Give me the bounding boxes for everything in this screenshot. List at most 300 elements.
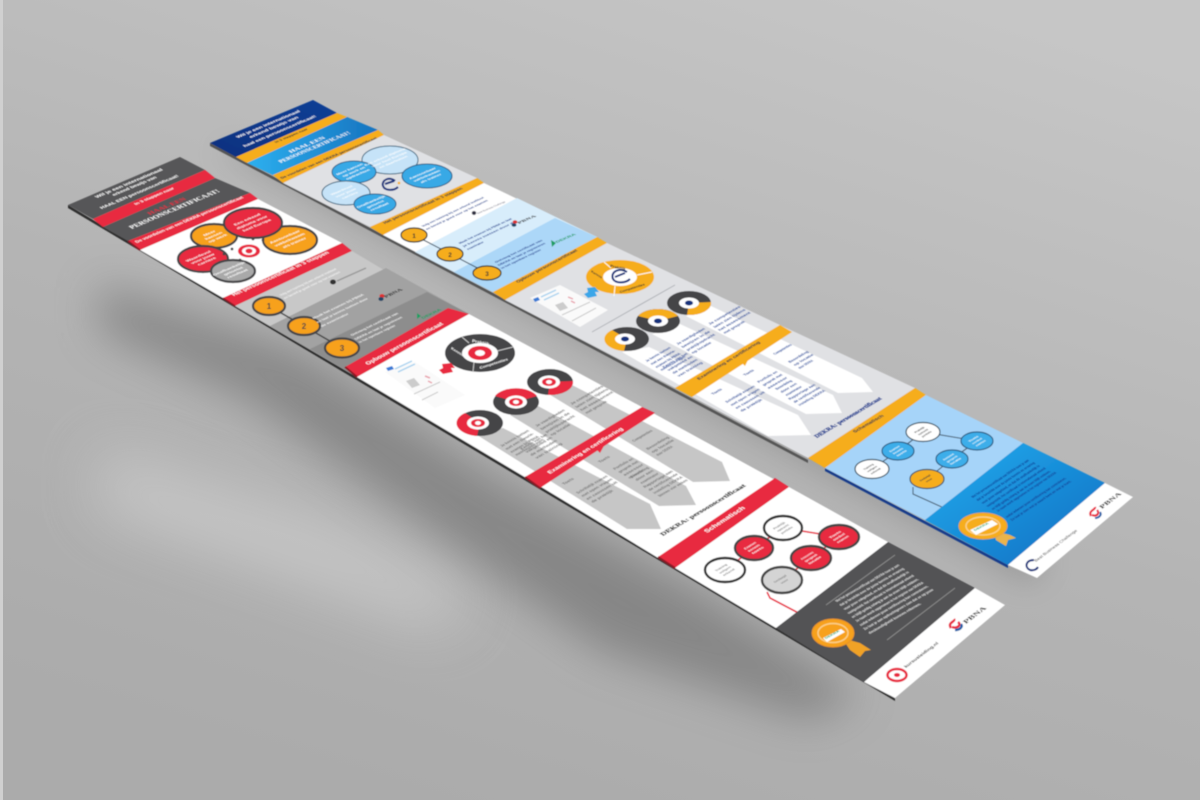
column: praktijk arrow <box>510 406 696 506</box>
text: closing paragraph: en blijft geldig zolang je aan de eisen blijft voldoen. <box>850 578 921 619</box>
flow node labels: Praktijk <box>772 521 787 530</box>
certificate example <box>530 285 608 327</box>
flow node labels: Examen <box>889 445 901 453</box>
logo: business challenge <box>330 268 366 284</box>
column texts: door DEKRA <box>655 445 675 457</box>
chart: small donut competenties <box>527 369 573 395</box>
flow node 3 <box>906 422 940 442</box>
step 2: 2 <box>448 252 452 259</box>
bubble texts: diploma voor <box>235 215 269 230</box>
mockup: blue and yellow strip <box>210 100 1133 578</box>
column: competenties arrow <box>686 306 873 393</box>
column texts: examinator <box>784 385 804 397</box>
heading: examinering: Examinering en certificering <box>547 427 625 475</box>
column texts: bewijzen in de <box>539 412 572 431</box>
bubble texts: Onafhankelijk <box>355 194 387 208</box>
column texts: de certificerende <box>647 473 680 492</box>
text: voordelen: De voordelen van een DEKRA persoonscertificaat <box>279 137 379 180</box>
step texts: Ontvang het certificaat van <box>349 312 400 336</box>
bubble texts: vakbekwaam <box>412 169 442 182</box>
column texts: het assessment <box>717 311 752 332</box>
band: opbouw <box>345 308 469 377</box>
band: voordelen <box>273 130 384 183</box>
connectors <box>872 432 977 513</box>
logo: business challenge <box>472 201 507 215</box>
column texts: Kennis van het <box>661 352 690 369</box>
flow node labels: examen <box>836 535 850 544</box>
flow node labels: Training <box>714 563 728 572</box>
column: kennis arrow <box>622 347 811 436</box>
flow node labels <box>863 426 987 484</box>
bubble texts: getoetst <box>365 199 386 209</box>
column texts: met een theorie- <box>504 432 536 451</box>
bubble texts: Een erkend <box>233 213 262 226</box>
heading: header question: HAAL EEN persoonscertificaat! <box>99 175 181 210</box>
heading: schematisch: Schematisch <box>852 414 886 434</box>
flow node labels <box>714 521 851 586</box>
heading: schematisch: Schematisch <box>702 505 747 534</box>
bubble texts: Meer kansen <box>335 162 364 176</box>
step 2 <box>288 317 320 335</box>
bubble: grey lower <box>211 260 255 282</box>
bubble: blue left <box>332 161 376 183</box>
column texts: assessor <box>766 376 789 390</box>
panel: blue closing section <box>925 443 1105 565</box>
column texts: assessor <box>622 463 646 477</box>
column texts: Toets <box>561 477 576 486</box>
text: closing paragraph: Met het persoonscertificaat van DEKRA toon je aan <box>970 459 1031 499</box>
flow node labels: volgen <box>866 465 879 473</box>
panel: schematisch <box>675 487 888 628</box>
flow node labels: Toets <box>828 530 843 539</box>
flow node 3 <box>764 516 802 540</box>
heading: dekra persoonscertificaat: DEKRA: persoonscertificaat <box>658 483 748 537</box>
band: voordelen <box>128 193 258 250</box>
chart: large donut: Competenties <box>479 357 509 370</box>
bubble texts: heel Europa <box>241 218 273 232</box>
column texts: op locatie <box>650 439 676 454</box>
logo: PBNA footer <box>950 605 989 630</box>
column texts: Kennis van het <box>519 433 549 451</box>
flow node labels: oordeel <box>832 533 846 541</box>
column texts: Schriftelijk examen <box>724 385 757 404</box>
title <box>276 130 352 164</box>
bubble texts: Meer <box>202 230 217 237</box>
bubble texts: voor heel Europa <box>370 151 409 168</box>
logo: PBNA: PBNA <box>516 215 538 225</box>
title: PERSOONSCERTIFICAAT! <box>276 130 352 164</box>
text: footer site: kursusleiding.nl <box>903 641 941 669</box>
bubble texts: Onafhankelijk <box>212 261 247 276</box>
column texts: door een <box>779 382 799 394</box>
flow node labels: opdracht <box>917 428 930 436</box>
bubble texts: carrière <box>196 256 218 266</box>
pointer dots <box>223 238 264 261</box>
flow node 2 <box>882 442 914 460</box>
bubble texts: Waardevol <box>185 250 212 262</box>
heading: header question: haal een persoonscertificaat! <box>242 115 318 148</box>
column texts: Rapportage aan <box>787 383 817 401</box>
flow node 5 <box>936 450 968 468</box>
band: yellow intro <box>236 113 347 163</box>
heading: header question: erkend bewijs van <box>248 116 300 139</box>
connectors <box>725 528 839 618</box>
column texts: Beoordeling <box>629 466 651 479</box>
flow node labels: portfolio <box>780 526 794 535</box>
flow node labels: kennis <box>747 543 762 552</box>
step 1: 1 <box>267 302 272 311</box>
chart: large donut: Competenties <box>619 283 645 294</box>
logo: PBNA footer: PBNA <box>1097 490 1124 510</box>
heading: dekra persoonscertificaat: DEKRA: persoonscertificaat <box>812 396 884 439</box>
arrow <box>584 287 599 298</box>
heading: opbouw: Opbouw persoonscertificaat <box>363 321 445 366</box>
certificate example <box>385 361 465 408</box>
panel: lower grey section <box>675 325 915 458</box>
flow node labels: toets <box>896 450 908 457</box>
bubble texts: als trainer <box>419 173 443 184</box>
text: closing paragraph <box>970 459 1073 522</box>
text: closing paragraph: en blijft geldig zolang je aan de eisen blijft voldoen. <box>990 470 1052 511</box>
column texts: van training <box>676 361 704 378</box>
flow node 4 <box>961 432 993 450</box>
bubble texts <box>185 212 311 281</box>
column texts: laten zien tijdens <box>574 388 610 409</box>
column texts: op locatie <box>549 423 572 437</box>
flow node 6 <box>762 567 802 593</box>
step texts: Volg een training bij een erkend instituut <box>421 196 486 227</box>
flow node labels: portfolio <box>921 430 933 438</box>
band: het persoonscertificaat in 3 stappen <box>223 243 352 306</box>
chart: large donut <box>445 334 515 372</box>
column texts <box>499 385 690 504</box>
flow node labels: Geslaagd <box>919 474 932 482</box>
flow node labels: kennis <box>892 447 904 455</box>
column texts: de methoden <box>671 358 699 375</box>
step texts <box>421 196 547 269</box>
chart: small donut praktijk <box>636 309 680 333</box>
mockup: grey and red strip <box>68 157 1005 701</box>
column texts: door DEKRA <box>797 359 815 370</box>
text: closing paragraph: dat je beschikt over de juiste kennis en ervaring <box>838 567 906 607</box>
step texts: DEKRA en laat je registreren <box>497 242 547 266</box>
text: closing paragraph: Zo laat je aan opdrachtgevers zien dat ze op jouw <box>862 588 935 631</box>
text: closing paragraph: voor jouw vakgebied, en dat dit onafhankelijk is <box>980 464 1042 505</box>
step 1 <box>401 228 427 242</box>
column texts: Toets <box>710 388 724 396</box>
bubble texts: getoetst <box>222 266 245 276</box>
bubble texts: carrière <box>340 191 360 200</box>
icon: logo e <box>383 179 400 190</box>
text: in 3 stappen: In 3 stappen naar <box>273 128 309 143</box>
flow node labels: locatie <box>949 457 962 465</box>
icon: medal <box>959 513 1016 546</box>
bubble texts: opdrachten <box>345 168 372 180</box>
column texts: met een theorie- <box>649 349 678 366</box>
column texts: gesprek met <box>761 373 784 387</box>
column texts: het assessment <box>579 391 615 412</box>
panel: dark closing section <box>776 542 975 682</box>
column texts: praktijkopdracht <box>544 415 577 434</box>
step 2: 2 <box>302 322 307 331</box>
text: closing paragraph: voor jouw vakgebied, en dat dit onafhankelijk is <box>842 571 911 611</box>
step 1: 1 <box>412 233 416 240</box>
flow node labels: erkend <box>870 467 882 475</box>
step texts: in het openbare register <box>357 324 397 343</box>
step 3 <box>325 338 359 358</box>
text: closing paragraph: vastgesteld. Het certificaat is internationaal erkend <box>985 467 1048 508</box>
step texts: in het openbare register <box>500 249 543 269</box>
flow node labels: oordeel <box>971 437 983 445</box>
panel: navy header <box>210 100 337 157</box>
column texts: meerkeuzevragen <box>514 438 546 457</box>
column texts: meerkeuzevragen <box>659 355 687 372</box>
column texts: en casussen uit <box>585 481 619 501</box>
chart: small donut praktijk <box>493 388 539 415</box>
flow node labels: voor <box>925 477 934 483</box>
heading: 3 stappen: Het persoonscertificaat in 3 stappen <box>231 251 331 297</box>
heading: examinering: Examinering en certificering <box>696 341 762 381</box>
logo: DEKRA: DEKRA <box>420 308 444 320</box>
panel: three steps <box>235 251 469 377</box>
connector line <box>269 306 342 348</box>
column texts: Beoordeling <box>787 350 810 364</box>
flow node labels: Praktijk <box>914 426 926 434</box>
column texts: binnen vier weken <box>657 479 690 498</box>
step texts: DEKRA en laat je registreren <box>353 316 404 340</box>
bubble: red big <box>224 208 282 238</box>
text: closing paragraph: Je naam wordt opgenomen in het register van DEKRA <box>854 581 926 623</box>
text: closing paragraph: Met het persoonscertificaat van DEKRA toon je aan <box>834 564 901 603</box>
bubble texts: als trainer <box>281 237 308 248</box>
panel: footer <box>864 588 1005 698</box>
chart: large donut: Praktijk <box>610 263 627 271</box>
flow node labels: erkend <box>722 568 736 577</box>
column texts: Beoordeling <box>645 436 671 451</box>
column texts: met open vragen <box>580 478 614 498</box>
logo: PBNA <box>512 215 538 227</box>
icon: medal: DEKRA <box>973 522 990 531</box>
column texts: praktijkopdracht <box>685 333 717 352</box>
column texts: de praktijk <box>590 489 616 504</box>
title: HAAL EEN <box>288 136 327 154</box>
column texts: Competenties <box>772 343 794 356</box>
chart: large donut <box>586 260 654 296</box>
column texts: Je vaardigheden <box>675 327 707 346</box>
flow node 1 <box>855 460 889 478</box>
text: closing paragraph: zodat iedereen jouw certificering kan controleren. <box>1004 477 1068 519</box>
bubble texts: kansen <box>204 231 224 240</box>
column texts: Toets <box>742 369 756 377</box>
column texts: Portfolio en <box>756 370 779 384</box>
column texts: Rapportage aan <box>642 470 675 489</box>
panel: three steps <box>383 183 597 292</box>
text: closing paragraph: Zo laat je zien wat je waard bent en wat je kunt. <box>1009 480 1073 522</box>
column texts: gesprek met <box>617 460 640 474</box>
logo: PBNA footer: PBNA <box>961 605 989 625</box>
column texts: op locatie <box>627 469 645 480</box>
flow node labels: toets <box>751 545 766 555</box>
text: closing paragraph: vastgesteld. Het certificaat is internationaal erkend <box>846 574 916 615</box>
bubble texts: Aantoonbaar <box>408 166 438 180</box>
step texts: Volg een training bij een erkend instituut <box>278 267 338 296</box>
panel: dark top header <box>68 157 205 219</box>
column texts: Beoordeling <box>774 379 794 391</box>
step 1 <box>253 297 285 315</box>
column texts: laten zien tijdens <box>712 308 747 329</box>
column texts: Competenties <box>631 429 654 443</box>
panel: blue title <box>247 117 378 175</box>
step texts: examinator <box>466 241 485 250</box>
flow node labels: Training <box>863 463 875 471</box>
column texts: bewijzen in de <box>680 330 712 349</box>
column texts: de methoden <box>529 439 559 457</box>
logo: DEKRA <box>551 233 578 247</box>
column texts: Schriftelijk examen <box>575 475 609 495</box>
connector <box>414 235 487 273</box>
step texts: en bereid je goed voor op het examen <box>425 199 490 230</box>
column texts: de certificerende <box>792 386 822 404</box>
chart: large donut: Kennis <box>451 347 464 357</box>
chart: small donut kennis <box>457 410 503 436</box>
bubble texts: en daarbuiten <box>378 155 409 169</box>
bubble texts: voor jouw <box>190 253 216 265</box>
logo: best business challenge: Best Business Challenge <box>1033 529 1079 563</box>
chart: small donut competenties <box>667 291 711 315</box>
text: closing paragraph: deskundigheid kunnen rekenen. <box>867 602 923 635</box>
step texts: de examinator <box>319 312 350 327</box>
chart: large donut: Kennis <box>591 270 602 280</box>
separator <box>592 285 675 332</box>
bubble: orange left <box>191 224 237 248</box>
heading: opbouw: Opbouw persoonscertificaat <box>515 249 579 284</box>
band: examinering <box>675 325 792 397</box>
column texts: Je kennis toetsen <box>644 346 672 363</box>
step texts: je kennis toetsen door de <box>461 221 517 248</box>
flow node labels: voor <box>779 578 790 584</box>
text: closing paragraph: dat je beschikt over de juiste kennis en ervaring <box>975 461 1037 502</box>
band: schematisch <box>658 478 789 568</box>
flow node 6 <box>910 470 944 488</box>
column texts: en casussen uit <box>734 391 767 410</box>
heading: header question: Wil je een internationaal <box>94 168 165 199</box>
flow node labels: gesprek <box>803 553 819 563</box>
bubble texts: op werk <box>207 233 229 243</box>
logo: PBNA footer <box>1090 490 1124 518</box>
strip side edge <box>210 143 1008 568</box>
band: red intro <box>93 170 215 227</box>
flow node 5 <box>791 546 831 570</box>
column texts: door een <box>634 469 655 482</box>
step 2 <box>437 247 463 261</box>
logo: best business challenge <box>1027 529 1079 570</box>
text: in 3 stappen: In 3 stappen naar <box>133 187 176 206</box>
logo: red ring <box>888 669 906 681</box>
heading: header question: erkend bewijs van <box>111 176 159 197</box>
bubble texts: vakbekwaam <box>273 232 306 247</box>
step texts: Ontvang het certificaat van <box>494 239 544 263</box>
panel: opbouw <box>505 243 780 388</box>
column texts: van training <box>534 442 564 460</box>
column texts: met open vragen <box>729 388 762 407</box>
column texts: Je kennis toetsen <box>499 429 531 448</box>
bubble texts: resultaat <box>226 268 250 279</box>
bubble: pale lower <box>322 181 370 205</box>
icon: medal <box>812 619 871 657</box>
logo: business challenge: Best Business Challenge <box>476 201 507 214</box>
logo: PBNA: PBNA <box>383 288 405 299</box>
panel: voordelen bubbles <box>140 199 342 298</box>
column texts: instelling DEKRA <box>797 389 827 407</box>
flow node 2 <box>735 536 773 560</box>
flow node labels: Geslaagd <box>772 574 788 583</box>
panel: footer <box>1008 483 1133 578</box>
bubble texts: voor jouw <box>334 187 358 198</box>
column texts: de praktijk <box>739 398 764 413</box>
flow node labels: Assessment <box>942 453 955 461</box>
panel: dark title <box>103 178 250 241</box>
icon: medal: DEKRA <box>824 630 841 639</box>
panel: opbouw <box>357 314 642 477</box>
panel: lower white section <box>525 407 788 567</box>
logo: DEKRA: DEKRA <box>554 233 578 244</box>
flow node labels: Examen <box>743 541 757 550</box>
bubble: orange right <box>263 226 317 254</box>
step texts: Maak het examen bij PBNA <box>311 293 365 319</box>
flow node labels: gesprek <box>946 455 959 463</box>
step 3: 3 <box>340 344 345 353</box>
column texts: met gesprek <box>722 320 747 335</box>
column texts: vakgebied en <box>666 355 694 372</box>
column texts: examinator <box>639 472 661 485</box>
text: closing paragraph <box>826 555 955 640</box>
column texts: examen bij PBNA <box>509 435 541 454</box>
bubble: pale big <box>362 146 418 174</box>
band: 3 stappen <box>370 178 484 235</box>
column texts: Je competenties <box>707 305 742 326</box>
flow node labels: examen <box>975 439 987 447</box>
chart: large donut: Praktijk <box>472 338 490 347</box>
title: HAAL EEN <box>145 196 189 216</box>
flow node 4 <box>819 525 859 549</box>
column texts: Toets <box>597 455 612 464</box>
column texts: instelling DEKRA <box>652 476 685 495</box>
step 3 <box>473 266 501 280</box>
column texts: Portfolio en <box>612 457 635 471</box>
flow node labels: locatie <box>807 555 823 565</box>
step 3: 3 <box>485 271 489 278</box>
flow node 1 <box>705 558 745 582</box>
column texts: examen bij PBNA <box>654 352 683 369</box>
column: praktijk arrow <box>652 324 842 414</box>
step texts: en laat je kennis toetsen door <box>315 297 369 323</box>
text: closing paragraph: Je naam wordt opgenomen in het register van DEKRA <box>995 471 1059 513</box>
column texts: op locatie <box>690 341 713 355</box>
step texts: Maak het examen bij PBNA en laat <box>458 218 514 244</box>
logo: PBNA <box>378 288 405 301</box>
bubble texts: Waardevol <box>329 185 354 196</box>
bubble texts: op werk en <box>341 166 367 177</box>
bubble texts <box>329 147 446 214</box>
title: PERSOONSCERTIFICAAT! <box>126 188 222 230</box>
chart: small donut kennis <box>604 327 649 351</box>
bubble texts: resultaat <box>369 202 391 211</box>
arrow <box>439 363 455 374</box>
flow node labels: volgen <box>718 565 732 574</box>
band: examinering <box>525 407 655 488</box>
panel: voordelen bubbles <box>283 135 477 227</box>
bubble texts: Aantoonbaar <box>268 229 301 244</box>
